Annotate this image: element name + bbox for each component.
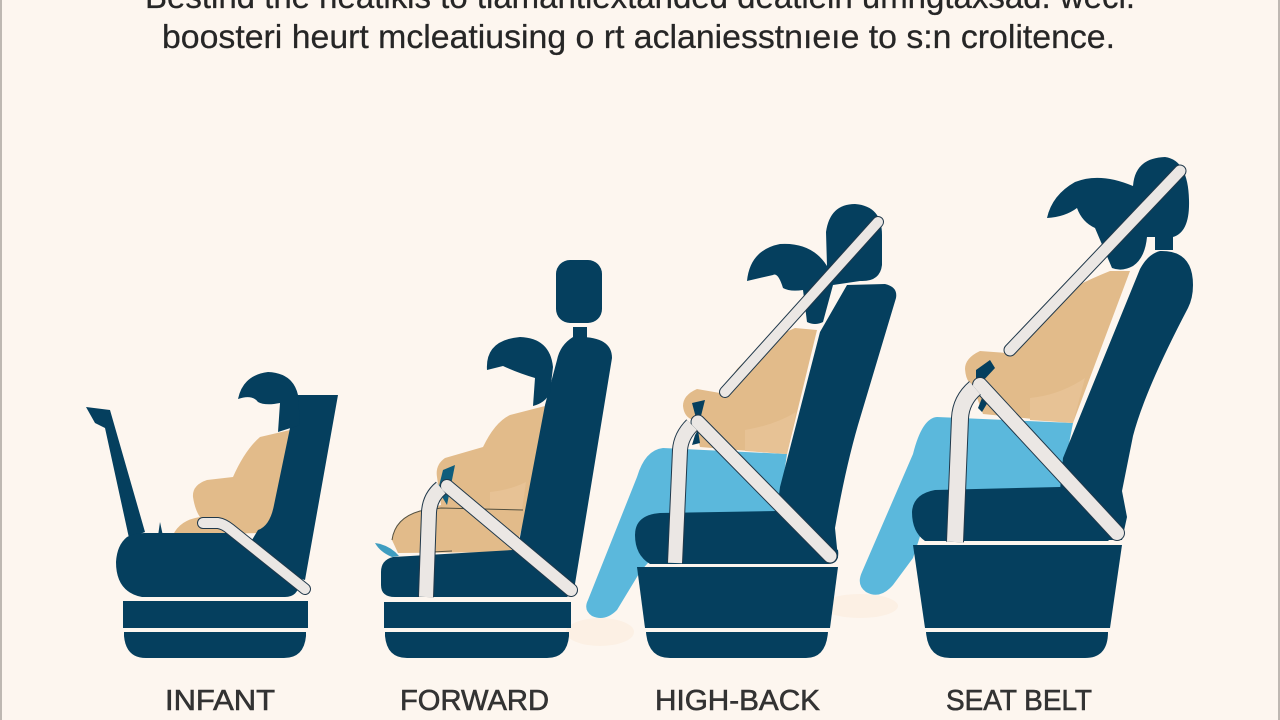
high-back hand [692,400,705,445]
seat belt hair and head [1047,157,1189,270]
seat belt label: SEAT BELT [946,685,1092,717]
high-back shoulder belt [725,222,878,392]
infant harness strap [203,523,305,589]
seat belt hand [976,360,995,412]
forward headrest [556,260,602,323]
stage 2: forward-facing seat [375,260,612,717]
infant seat cushion [116,533,300,597]
seat belt base [913,545,1122,658]
infant seat back [240,395,338,580]
high-back seat cushion [635,511,838,564]
high-back diagonal belt [698,422,830,556]
high-back hair and headrest [747,204,882,324]
seat belt diagonal strap [980,385,1117,533]
seat belt seat back [1060,251,1193,540]
forward hair [487,337,553,406]
high-back label: HIGH-BACK [655,685,821,717]
forward diagonal belt [447,486,571,590]
forward body [392,406,545,553]
seat belt body [965,271,1130,423]
forward seat base [384,602,571,658]
high-back seat back [777,284,896,560]
infant seat base [123,601,308,658]
forward label: FORWARD [400,685,549,717]
forward hand [438,465,455,505]
forward seat cushion [381,550,575,597]
infant carry handle [86,407,145,538]
stage 1: infant seat [86,372,338,717]
stage 4: seat belt [860,157,1193,717]
forward vertical belt [426,488,441,597]
seat belt vertical strap [955,388,975,542]
forward foot [375,543,399,557]
high-back seat base [637,567,838,658]
intro text [145,0,1135,55]
stage 3: high-back booster [586,204,896,717]
intro text: boosteri heurt mcleatiusing o rt aclaniesstnıeıe to s:n crolitence. [162,18,1115,55]
high-back body [683,328,817,454]
infant body [173,430,290,535]
infant hair [238,372,300,432]
high-back vertical belt [675,425,692,563]
seat belt cushion [912,487,1120,541]
infant label: INFANT [165,685,275,717]
forward seat back [520,337,612,590]
seat belt legs [860,417,1073,595]
high-back legs [586,448,787,618]
seat belt shoulder strap [1010,171,1180,350]
